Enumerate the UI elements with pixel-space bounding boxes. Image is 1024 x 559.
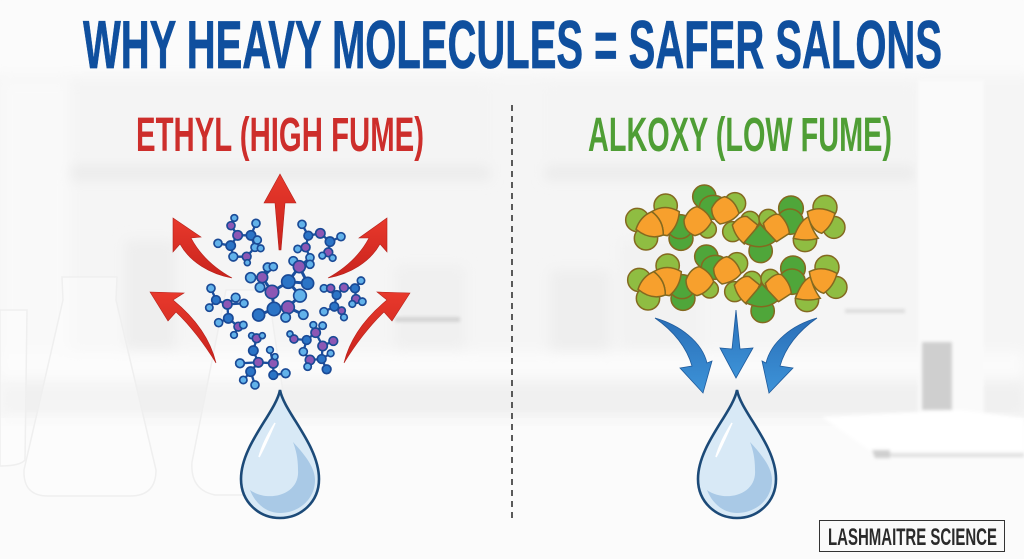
arrow: upper right [328,218,387,278]
water drop: alkoxy side [698,390,776,518]
molecule: central large [246,257,314,322]
molecule: right [320,277,366,321]
molecule: top right [294,220,345,267]
arrow: centre [720,310,753,378]
arrow: lower left [150,292,216,363]
ethyl molecules cluster [206,215,366,389]
red arrows: evaporating fumes [150,174,410,363]
alkoxy molecules: upper chain [626,185,845,263]
molecule: left [206,284,248,338]
arrow: lower right [344,292,410,363]
arrow: right [762,318,817,393]
microscope shape [822,80,1024,458]
arrow: up [264,174,296,250]
molecule: top left [214,215,264,266]
molecule: bottom right [287,322,338,374]
molecule: bottom left [236,333,290,389]
arrow: left [655,318,712,393]
heading: ethyl: ETHYL (HIGH FUME) [136,109,424,162]
alkoxy molecules: lower chain [628,245,847,323]
arrow: upper left [173,218,232,278]
glass flasks [0,277,290,496]
divider [511,105,513,520]
water drop: ethyl side [241,390,319,518]
blue arrows: molecules stay down [655,310,817,393]
